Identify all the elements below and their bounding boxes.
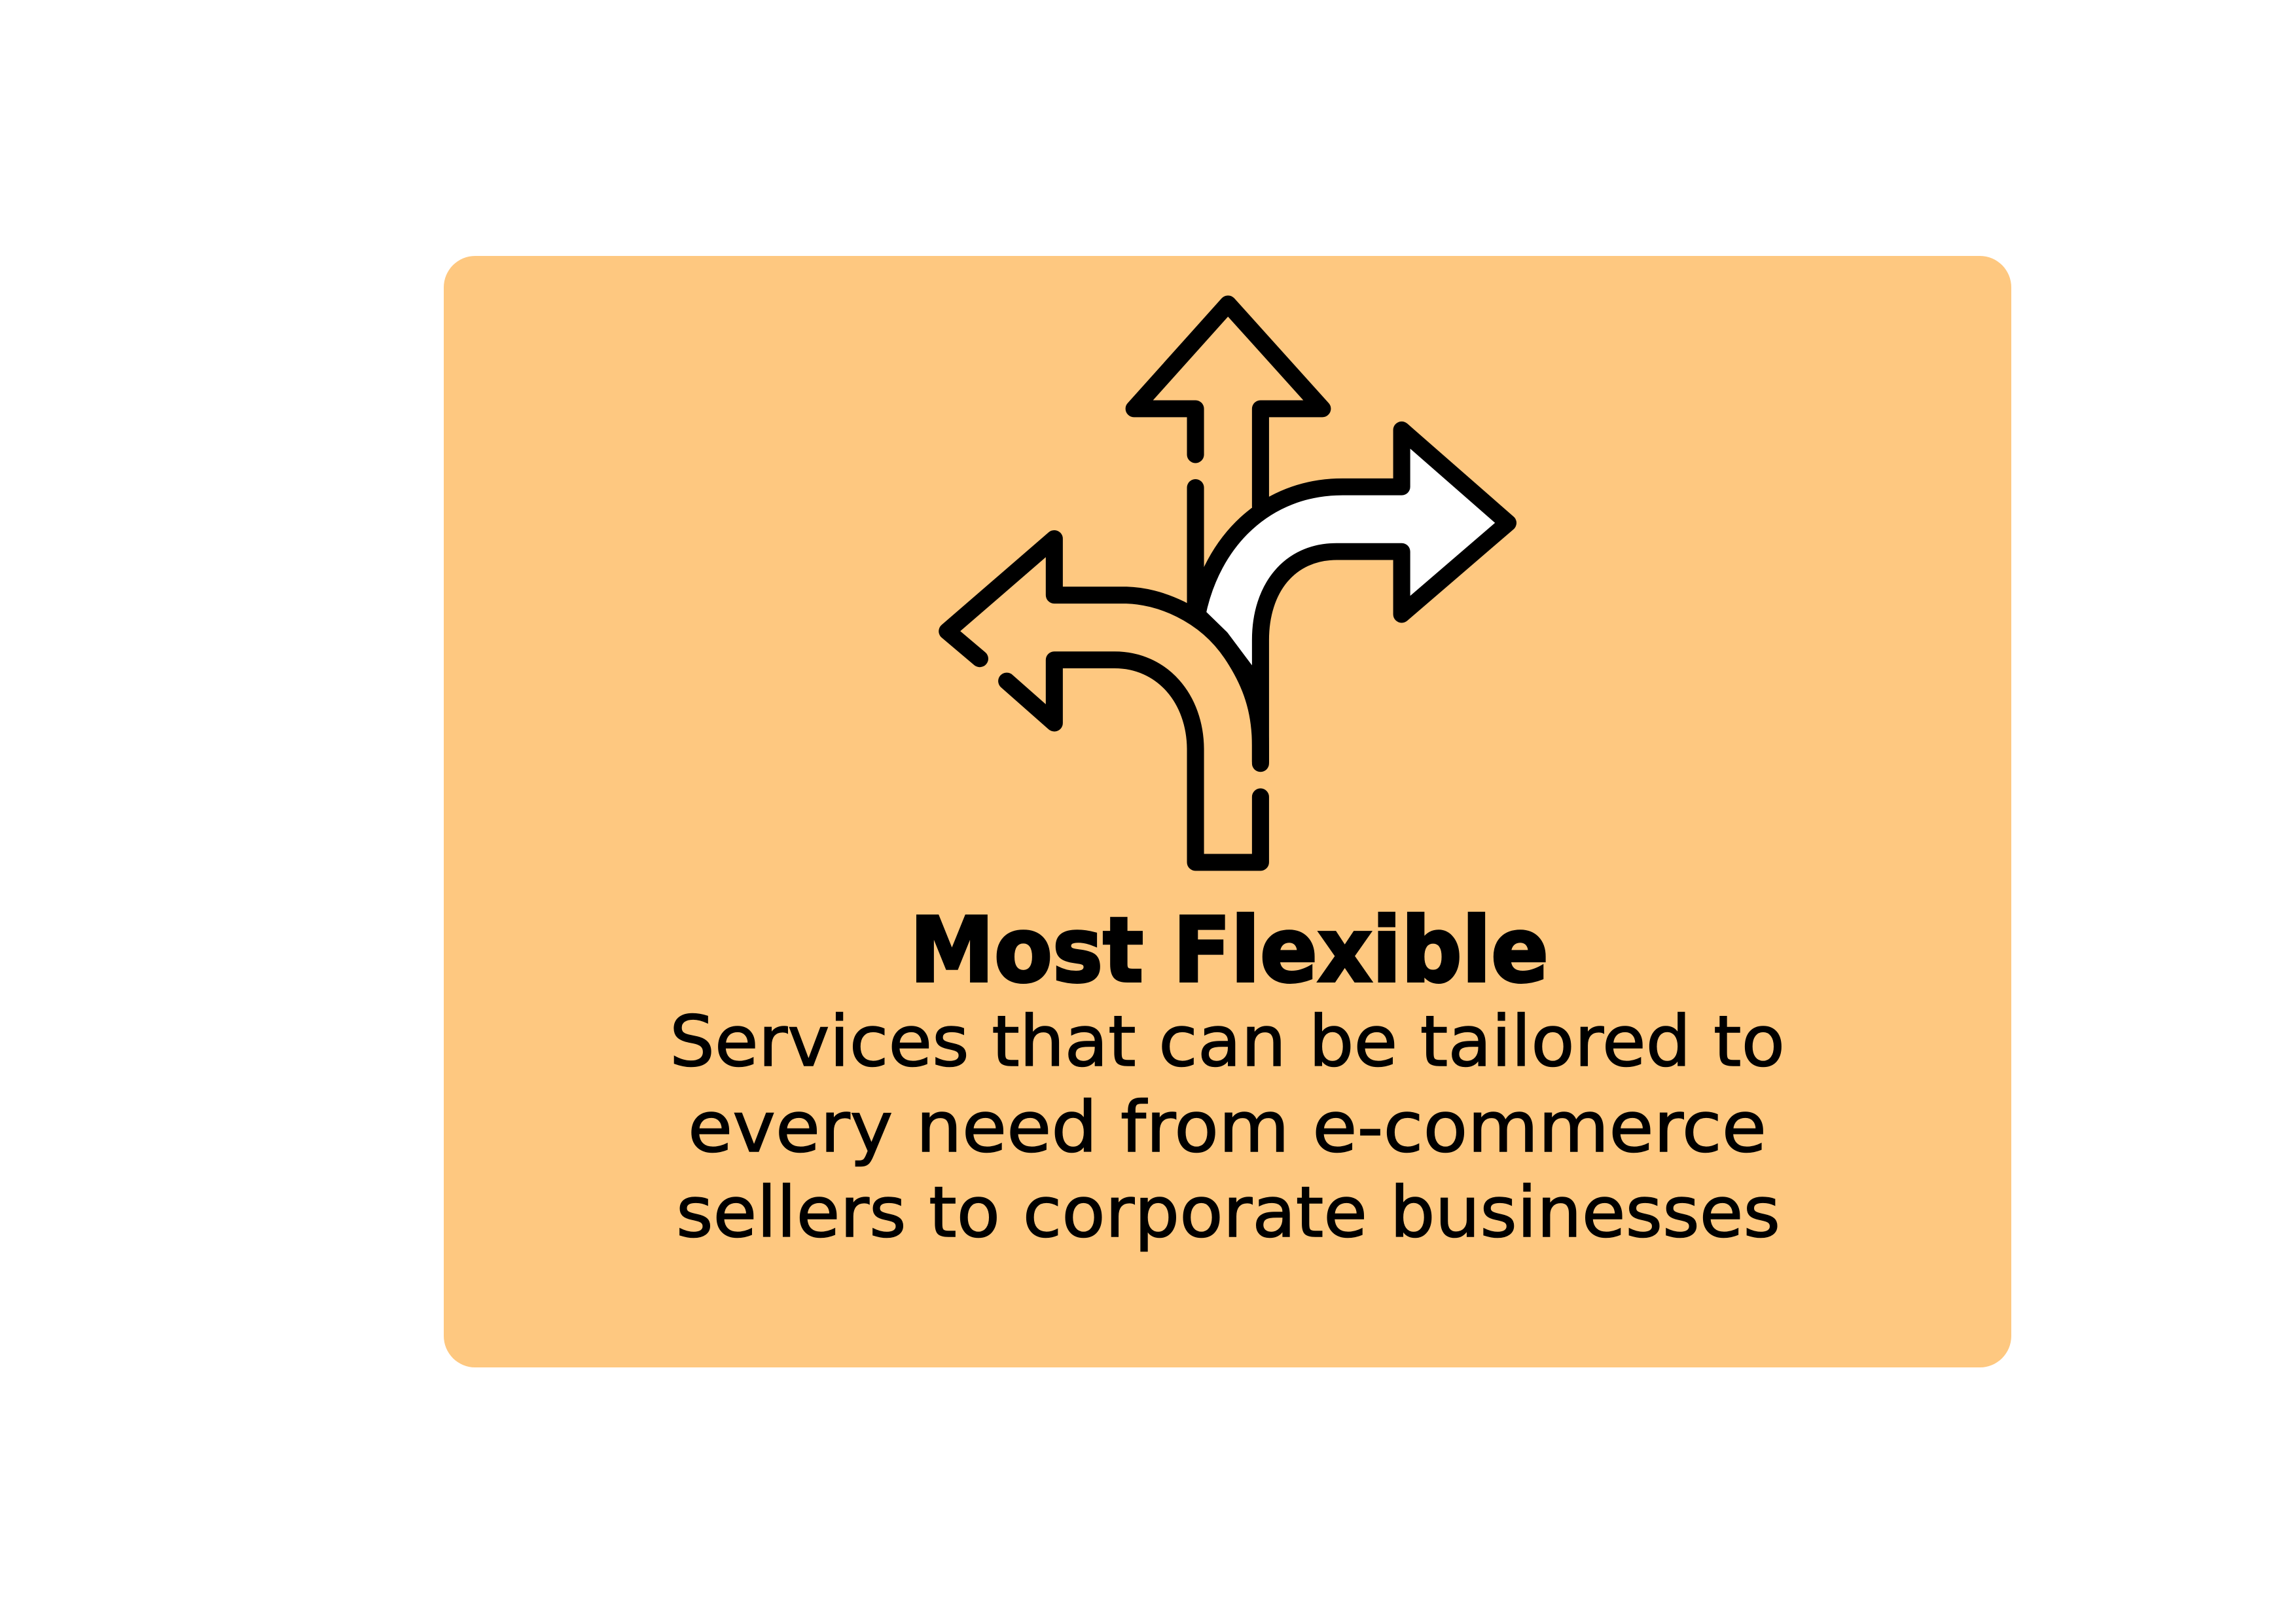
- icon part: left arrow lower edge: [1007, 660, 1261, 862]
- text block: description: sellers to corporate businesses: [676, 1172, 1780, 1254]
- icon part: left arrow upper edge: [947, 539, 1261, 763]
- heading: Most Flexible: [910, 899, 1549, 1003]
- panel: flexible card: [444, 256, 2011, 1367]
- icon part: upward arrow stem: [1181, 488, 1210, 613]
- text block: description: every need from e-commerce: [688, 1087, 1767, 1168]
- icon: branching arrows: [947, 304, 1508, 862]
- icon part: upward arrow: [1134, 304, 1322, 507]
- icon part: highlighted right arrow: [1197, 430, 1508, 761]
- text block: description: [670, 1001, 1785, 1254]
- text block: description: Services that can be tailored to: [670, 1001, 1785, 1083]
